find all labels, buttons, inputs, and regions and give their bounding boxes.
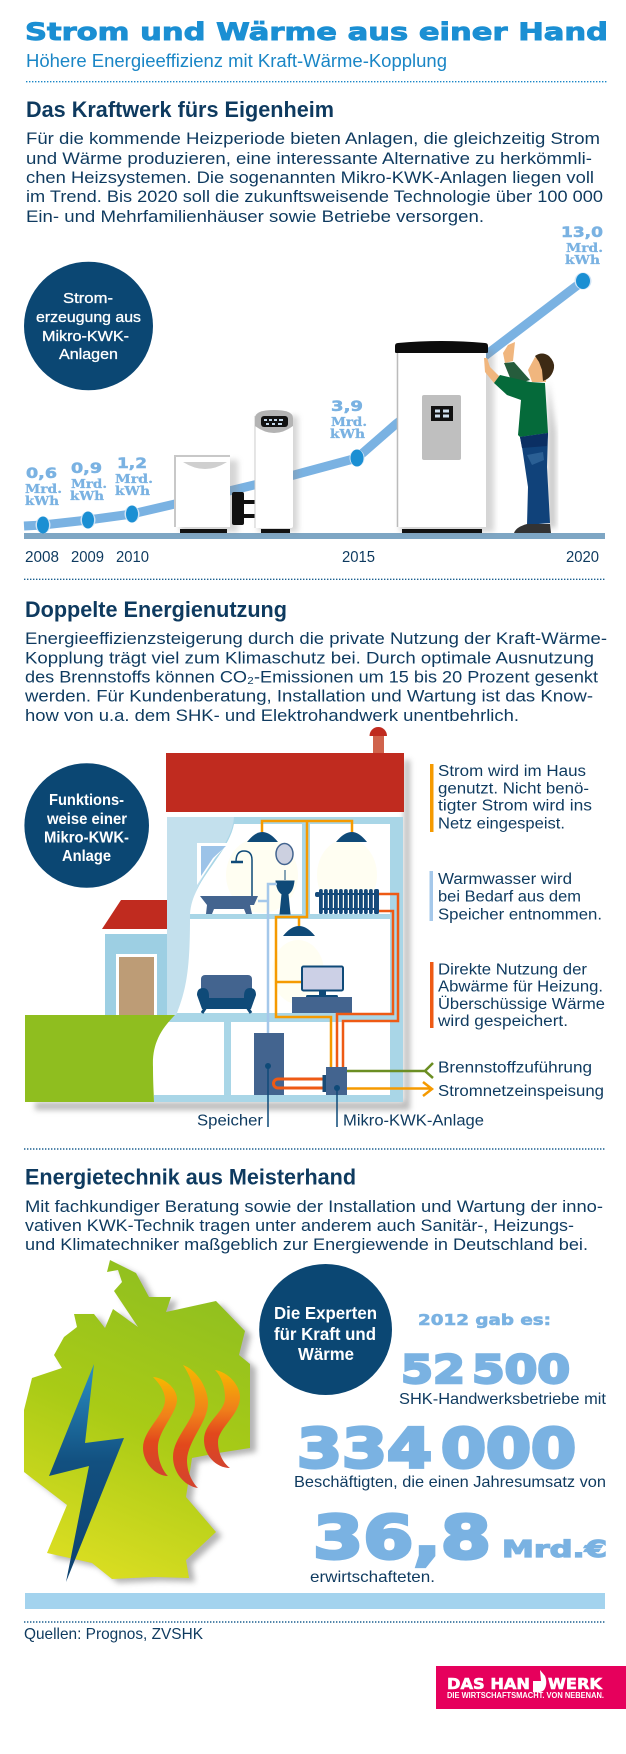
text block: intro section 2: werden. Für Kundenberatung, Installation und Wartung ist das Know- — [24, 687, 593, 706]
circle: Funktionsweise label: Mikro-KWK- — [44, 830, 129, 847]
heading: Energietechnik aus Meisterhand: Energietechnik aus Meisterhand — [25, 1164, 356, 1189]
stat: 52 500 — [401, 1348, 570, 1393]
value label 0,9: 0,9 — [71, 461, 102, 477]
water pipe — [258, 884, 277, 1034]
value label 0,6: kWh — [25, 493, 59, 508]
legend: Abwärme: Direkte Nutzung der — [438, 961, 587, 978]
lawn — [25, 1015, 175, 1102]
legend: Abwärme: Überschüssige Wärme — [438, 995, 605, 1013]
storage tank — [254, 1033, 284, 1095]
value label 3,9: Mrd. — [331, 414, 367, 429]
text block: intro section 2: how von u.a. dem SHK- und Elektrohandwerk unentbehrlich. — [25, 706, 519, 725]
circle: Die Experten: für Kraft und — [274, 1324, 376, 1344]
circle: Funktionsweise label: Funktions- — [49, 792, 124, 809]
heading: Doppelte Energienutzung: Doppelte Energienutzung — [25, 597, 287, 622]
circle: Funktionsweise label: weise einer — [46, 811, 127, 828]
logo: Das Handwerk: WERK — [548, 1675, 603, 1693]
value label 0,9: kWh — [70, 488, 104, 503]
lamp glows — [226, 837, 377, 1004]
stat intro: 2012 gab es: — [418, 1311, 551, 1329]
value label 0,6: Mrd. — [25, 481, 62, 496]
text block: intro section 1: im Trend. Bis 2020 soll die zukunftsweisende Technologie über 100 000 — [26, 187, 603, 206]
map shape — [24, 1260, 250, 1579]
value label 0,6: 0,6 — [26, 466, 57, 482]
KWK unit — [322, 1067, 347, 1095]
house body — [154, 817, 403, 1102]
value label 3,9: kWh — [330, 426, 365, 441]
rooms — [153, 824, 390, 1095]
circle: Stromerzeugung label: Mikro-KWK- — [42, 328, 129, 345]
value label 1,2 — [115, 456, 153, 498]
text block: intro section 3: Mit fachkundiger Beratung sowie der Installation und Wartung der inno- — [25, 1197, 603, 1216]
legend: Abwärme: Abwärme für Heizung. — [438, 979, 603, 996]
text block: intro section 1 — [26, 129, 603, 226]
circle: Stromerzeugung label: erzeugung aus — [36, 309, 141, 326]
circle: Stromerzeugung label: Anlagen — [59, 346, 118, 363]
text block: intro section 3: und Klimatechniker maßgeblich zur Energiewende in Deutschland bei. — [25, 1235, 588, 1254]
value label 1,2: 1,2 — [117, 456, 147, 472]
fuel line — [347, 1063, 433, 1078]
year axis labels: 2008 — [25, 549, 59, 566]
label Brennstoffzuführung: Brennstoffzuführung — [438, 1059, 592, 1076]
stat: 36,8 Mrd. € — [313, 1503, 607, 1573]
text block: intro section 2: des Brennstoffs können CO₂-Emissionen um 15 bis 20 Prozent gesenkt — [25, 668, 598, 687]
data nodes — [36, 272, 592, 534]
bolt — [49, 1364, 124, 1582]
year axis labels: 2010 — [116, 549, 149, 566]
value label 13,0: Mrd. — [566, 240, 603, 255]
circle: Die Experten: Wärme — [298, 1344, 354, 1364]
legend: Warmwasser: Warmwasser wird — [438, 871, 572, 888]
text block: intro section 1: chen Heizsystemen. Die sogenannten Mikro-KWK-Anlagen liegen voll — [26, 168, 594, 187]
label Mikro-KWK-Anlage: Mikro-KWK-Anlage — [343, 1113, 484, 1130]
value label 0,6 — [25, 466, 62, 508]
legend: Strom: Netz eingespeist. — [438, 815, 565, 832]
diagram: house — [24, 727, 484, 1130]
value label 13,0: 13,0 — [561, 225, 603, 241]
stat: 334 000: 334 — [297, 1417, 432, 1480]
stat caption: Beschäftigten, die einen Jahresumsatz von — [294, 1474, 606, 1491]
stat: 52 500: 52 — [401, 1348, 465, 1393]
icon: thumbs-up hand — [533, 1670, 546, 1692]
power feed arrow — [347, 1082, 432, 1096]
TV — [292, 966, 352, 1013]
cutaway wall — [167, 817, 234, 1015]
radiator — [315, 889, 379, 914]
stat: 334 000 — [297, 1417, 576, 1480]
label Speicher: Speicher — [197, 1113, 263, 1130]
bathroom fixtures — [200, 844, 294, 914]
ground bar — [24, 533, 605, 539]
logo: Das Handwerk: DIE WIRTSCHAFTSMACHT. VON NEBENAN. — [447, 1691, 604, 1700]
year axis labels: 2009 — [71, 549, 104, 566]
legend: Strom — [430, 763, 592, 832]
circle: Funktionsweise label — [24, 763, 149, 888]
heat pipes — [274, 894, 398, 1088]
map: Germany with bolt and flames — [24, 1260, 256, 1583]
house shadow — [35, 760, 410, 1110]
value label 13,0 — [561, 225, 603, 267]
value label 1,2: Mrd. — [115, 471, 153, 486]
legend: Strom: Strom wird im Haus — [438, 763, 586, 780]
appliance large — [395, 341, 494, 533]
sources: Quellen: Prognos, ZVSHK — [24, 1626, 203, 1643]
circle: Die Experten — [259, 1264, 392, 1395]
circle: Die Experten: Die Experten — [274, 1303, 377, 1323]
plug — [232, 492, 255, 525]
text block: intro section 1: Ein- und Mehrfamilienhäuser sowie Betriebe versorgen. — [26, 207, 484, 226]
subtitle: Höhere Energieeffizienz mit Kraft-Wärme-Kopplung — [26, 51, 447, 71]
sofa — [197, 975, 256, 1013]
callout leaders — [265, 1063, 340, 1127]
stat caption: SHK-Handwerksbetriebe mit — [399, 1391, 607, 1408]
electricity pipes — [262, 821, 352, 1067]
chart: Stromerzeugung growth line — [24, 225, 605, 566]
stat: 334 000: 000 — [441, 1417, 576, 1480]
logo: Das Handwerk — [436, 1666, 626, 1709]
circle: Funktionsweise label: Anlage — [62, 848, 111, 865]
year axis labels: 2020 — [566, 549, 599, 566]
stat caption: erwirtschafteten. — [310, 1569, 435, 1586]
circle: Stromerzeugung label — [24, 262, 153, 390]
value label 3,9: 3,9 — [331, 399, 363, 415]
logo: Das Handwerk: DAS HAN — [447, 1675, 530, 1693]
value label 0,9: Mrd. — [71, 476, 107, 491]
stat: 36,8 Mrd. €: 36,8 — [313, 1503, 491, 1573]
stat: 36,8 Mrd. €: Mrd.€ — [502, 1537, 607, 1563]
legend: Abwärme: wird gespeichert. — [437, 1013, 568, 1030]
appliance medium — [255, 410, 298, 533]
roof — [166, 753, 404, 812]
text block: intro section 3: vativen KWK-Technik tragen unter anderem auch Sanitär-, Heizungs- — [25, 1216, 574, 1235]
title: Strom und Wärme aus einer Hand — [25, 18, 608, 46]
flames — [143, 1365, 240, 1488]
legend: Warmwasser: bei Bedarf aus dem — [438, 889, 581, 906]
footer band — [25, 1593, 605, 1609]
trend line — [24, 281, 583, 526]
window — [197, 843, 228, 885]
legend: Warmwasser: Speicher entnommen. — [438, 906, 602, 923]
year axis labels — [25, 549, 599, 566]
stat: 52 500: 500 — [472, 1348, 570, 1393]
legend: Strom: genutzt. Nicht benö- — [438, 780, 589, 797]
value label 0,9 — [70, 461, 107, 503]
year axis labels: 2015 — [342, 549, 375, 566]
legend: Abwärme — [430, 961, 605, 1030]
text block: intro section 2 — [24, 629, 607, 725]
text block: intro section 2: Kopplung trägt viel zum Klimaschutz bei. Durch optimale Ausnutzung — [25, 648, 594, 667]
garage — [102, 900, 167, 1015]
value label 13,0: kWh — [565, 252, 600, 267]
circle: Stromerzeugung label: Strom- — [63, 290, 113, 307]
heading: Das Kraftwerk fürs Eigenheim: Das Kraftwerk fürs Eigenheim — [26, 97, 334, 122]
man — [484, 342, 556, 533]
label Stromnetzeinspeisung: Stromnetzeinspeisung — [438, 1083, 604, 1100]
chimney — [370, 727, 387, 754]
value label 1,2: kWh — [115, 483, 150, 498]
text block: intro section 3 — [25, 1197, 603, 1254]
value label 3,9 — [330, 399, 367, 441]
map shadow — [30, 1264, 256, 1583]
legend: Strom: tigter Strom wird ins — [438, 798, 592, 815]
text block: intro section 1: Für die kommende Heizperiode bieten Anlagen, die gleichzeitig Strom — [26, 129, 600, 148]
text block: intro section 2: Energieeffizienzsteigerung durch die private Nutzung der Kraft-Wärme- — [25, 629, 607, 648]
lamps — [247, 832, 367, 936]
appliance small — [175, 456, 238, 533]
text block: intro section 1: und Wärme produzieren, eine interessante Alternative zu herkömmli- — [26, 149, 592, 168]
legend: Warmwasser — [430, 871, 602, 923]
